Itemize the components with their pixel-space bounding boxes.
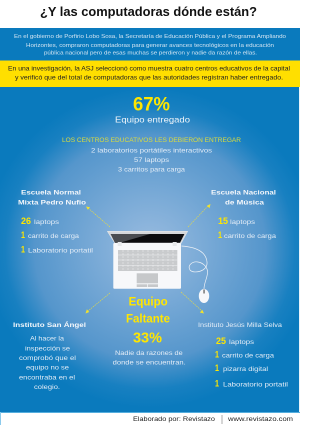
school: Instituto Jesús Milla Selva: laptops: [229, 339, 254, 346]
school: Instituto Jesús Milla Selva: pizarra digital: [223, 366, 268, 373]
footer credits: [0, 412, 300, 425]
list: equipment to deliver: 2 laboratorios portátiles interactivos: [91, 148, 212, 154]
school: Escuela Normal: 26: [21, 216, 31, 227]
school: Escuela Nacional: 15: [218, 216, 229, 227]
school: Escuela Nacional: laptops: [230, 219, 255, 226]
school: Escuela Nacional: Escuela Nacional: [211, 190, 276, 196]
laptop lid: [107, 231, 188, 244]
arrow: to Instituto San Ángel: [86, 293, 110, 314]
list: equipment to deliver: [62, 137, 241, 174]
yellow investigation band: y verificó que del total de computadoras que las autoridades registran haber entregado.: [15, 74, 283, 82]
school: Instituto San Ángel: inspección se: [25, 346, 71, 352]
stat: 33% missing equipment: Faltante: [126, 314, 170, 326]
school: Instituto San Ángel: [13, 320, 86, 391]
school: Instituto San Ángel: Al hacer la: [30, 336, 65, 343]
stat: 67% delivered: 67%: [133, 94, 170, 116]
school: Instituto Jesús Milla Selva: 25: [216, 336, 227, 347]
school: Instituto Jesús Milla Selva: Laboratorio portatil: [223, 382, 288, 389]
intro text block: Horizontes, compraron computadoras para generar avances tecnológicos en la educación: [26, 43, 274, 49]
stat: 67% delivered: [115, 94, 190, 124]
school: Escuela Normal: Escuela Normal: [21, 190, 81, 196]
intro text block: [14, 34, 286, 56]
school: Instituto San Ángel: equipo no se: [26, 365, 70, 372]
intro text block: En el gobierno de Porfirio Lobo Sosa, la Secretaría de Educación Pública y el Programa Ampliando: [14, 34, 286, 40]
school: Escuela Nacional: carrito de carga: [224, 233, 277, 240]
mouse: [199, 289, 209, 303]
school: Escuela Normal: Laboratorio portatil: [28, 248, 93, 254]
arrow: to Escuela Nacional: [188, 204, 210, 227]
school: Instituto San Ángel: comprobó que el: [19, 355, 76, 362]
school: Escuela Nacional: de Música: [225, 200, 264, 206]
school: Escuela Normal: [18, 190, 93, 256]
mouse cable: [182, 246, 208, 289]
school: Escuela Normal: laptops: [34, 219, 59, 226]
school: Instituto Jesús Milla Selva: Instituto Jesús Milla Selva: [198, 322, 283, 329]
title: ¿Y las computadoras dónde están?: [40, 5, 257, 19]
yellow investigation band: [0, 60, 300, 87]
yellow investigation band: En una investigación, la ASJ seleccionó como muestra cuatro centros educativos de la capital: [8, 66, 290, 72]
list: equipment to deliver: LOS CENTROS EDUCATIVOS LES DEBIERON ENTREGAR: [62, 137, 241, 144]
stat: 33% missing equipment: [113, 297, 186, 367]
school: Instituto San Ángel: encontraba en el: [19, 374, 75, 382]
school: Escuela Nacional: [211, 190, 277, 241]
intro text block: pública nacional pero de esas muchas se perdieron y nadie da razón de ellas.: [44, 50, 257, 56]
stat: 33% missing equipment: 33%: [133, 331, 162, 347]
stat: 33% missing equipment: Equipo: [129, 297, 168, 309]
school: Instituto Jesús Milla Selva: 1: [215, 363, 220, 374]
school: Instituto Jesús Milla Selva: 1: [215, 350, 220, 361]
list: equipment to deliver: 3 carritos para carga: [118, 166, 186, 174]
school: Instituto San Ángel: colegio.: [34, 384, 60, 391]
school: Instituto Jesús Milla Selva: [198, 322, 288, 390]
school: Escuela Normal: carrito de carga: [28, 233, 80, 240]
footer credits: www.revistazo.com: [227, 416, 293, 423]
school: Instituto Jesús Milla Selva: 1: [215, 379, 220, 390]
arrow: to Instituto Jesús Milla Selva: [181, 292, 204, 314]
school: Escuela Nacional: 1: [218, 230, 223, 241]
school: Escuela Normal: Mixta Pedro Nufio: [18, 200, 86, 206]
school: Escuela Normal: 1: [21, 230, 26, 241]
school: Instituto San Ángel: Instituto San Ángel: [13, 320, 86, 329]
school: Instituto Jesús Milla Selva: carrito de carga: [222, 353, 275, 360]
stat: 33% missing equipment: Nadie da razones de: [115, 350, 183, 357]
footer credits: Elaborado por: Revistazo: [133, 416, 215, 423]
icon: laptop and mouse: [107, 231, 209, 303]
school: Escuela Normal: 1: [21, 244, 26, 256]
stat: 33% missing equipment: donde se encuentran.: [113, 360, 186, 367]
list: equipment to deliver: 57 laptops: [134, 157, 169, 164]
stat: 67% delivered: Equipo entregado: [115, 114, 190, 124]
laptop base: [113, 242, 181, 289]
arrow: to Escuela Normal: [86, 206, 110, 227]
